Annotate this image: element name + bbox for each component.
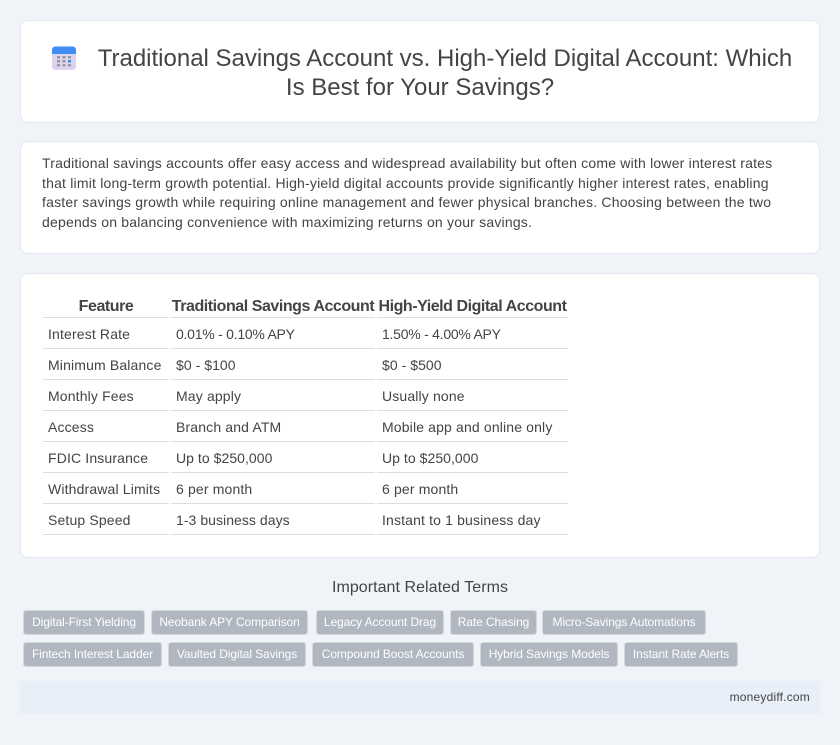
comparison table: Traditional Savings Account [172, 298, 374, 315]
title: Is Best for Your Savings? [286, 74, 554, 101]
tag: Micro-Savings Automations [553, 615, 695, 629]
comparison table: Branch and ATM [176, 418, 281, 434]
comparison table: Up to $250,000 [382, 450, 478, 466]
comparison table: 1.50% - 4.00% APY [382, 326, 501, 342]
tag: Vaulted Digital Savings [177, 647, 297, 661]
footer source: moneydiff.com [730, 690, 810, 704]
tag [316, 610, 444, 635]
comparison table: Interest Rate [48, 326, 130, 342]
tag [450, 610, 537, 635]
comparison table: Feature [79, 298, 133, 315]
comparison table: Instant to 1 business day [382, 512, 541, 528]
intro paragraph: depends on balancing convenience with maximizing returns on your savings. [42, 214, 532, 230]
comparison table [43, 298, 568, 535]
tag [168, 642, 306, 667]
tag [151, 610, 308, 635]
tag [23, 610, 145, 635]
comparison table: FDIC Insurance [48, 450, 148, 466]
intro paragraph [42, 155, 772, 230]
comparison table: May apply [176, 388, 241, 404]
tag [312, 642, 474, 667]
panel: header [20, 20, 820, 123]
tag: Compound Boost Accounts [322, 647, 464, 661]
heading: related terms: Important Related Terms [332, 579, 508, 596]
title: Traditional Savings Account vs. High-Yield Digital Account: Which [98, 45, 792, 72]
comparison table: Usually none [382, 388, 465, 404]
comparison table: Monthly Fees [48, 388, 134, 404]
tag: Hybrid Savings Models [489, 647, 609, 661]
comparison table: 6 per month [382, 480, 458, 496]
tag [480, 642, 618, 667]
comparison table: 1-3 business days [176, 512, 290, 528]
tag: Fintech Interest Ladder [32, 647, 153, 661]
comparison table: Mobile app and online only [382, 418, 552, 434]
comparison table: 6 per month [176, 480, 252, 496]
tag: Rate Chasing [458, 615, 529, 629]
icon: calendar [52, 46, 76, 70]
intro paragraph: that limit long-term growth potential. High-yield digital accounts provide significantly higher interest rates, enabling [42, 175, 769, 191]
tag [542, 610, 706, 635]
tag: Digital-First Yielding [32, 615, 136, 629]
tag: Instant Rate Alerts [633, 647, 729, 661]
comparison table: Minimum Balance [48, 356, 162, 372]
comparison table: Up to $250,000 [176, 450, 272, 466]
footer bar [20, 681, 820, 714]
comparison table: $0 - $100 [176, 356, 236, 372]
panel: comparison table [20, 273, 820, 558]
comparison table: $0 - $500 [382, 356, 442, 372]
title [98, 45, 792, 101]
comparison table: 0.01% - 0.10% APY [176, 326, 295, 342]
intro paragraph: Traditional savings accounts offer easy access and widespread availability but often come with lower interest rates [42, 155, 772, 171]
panel: intro text [20, 141, 820, 254]
comparison table: High-Yield Digital Account [378, 298, 566, 315]
tag: Legacy Account Drag [324, 615, 436, 629]
intro paragraph: faster savings growth while requiring online management and fewer physical branches. Choosing between the two [42, 194, 771, 210]
comparison table: Setup Speed [48, 512, 131, 528]
tag group: related terms [23, 610, 738, 667]
tag [624, 642, 738, 667]
tag [23, 642, 162, 667]
comparison table: Withdrawal Limits [48, 480, 160, 496]
tag: Neobank APY Comparison [159, 615, 300, 629]
comparison table: Access [48, 418, 94, 434]
